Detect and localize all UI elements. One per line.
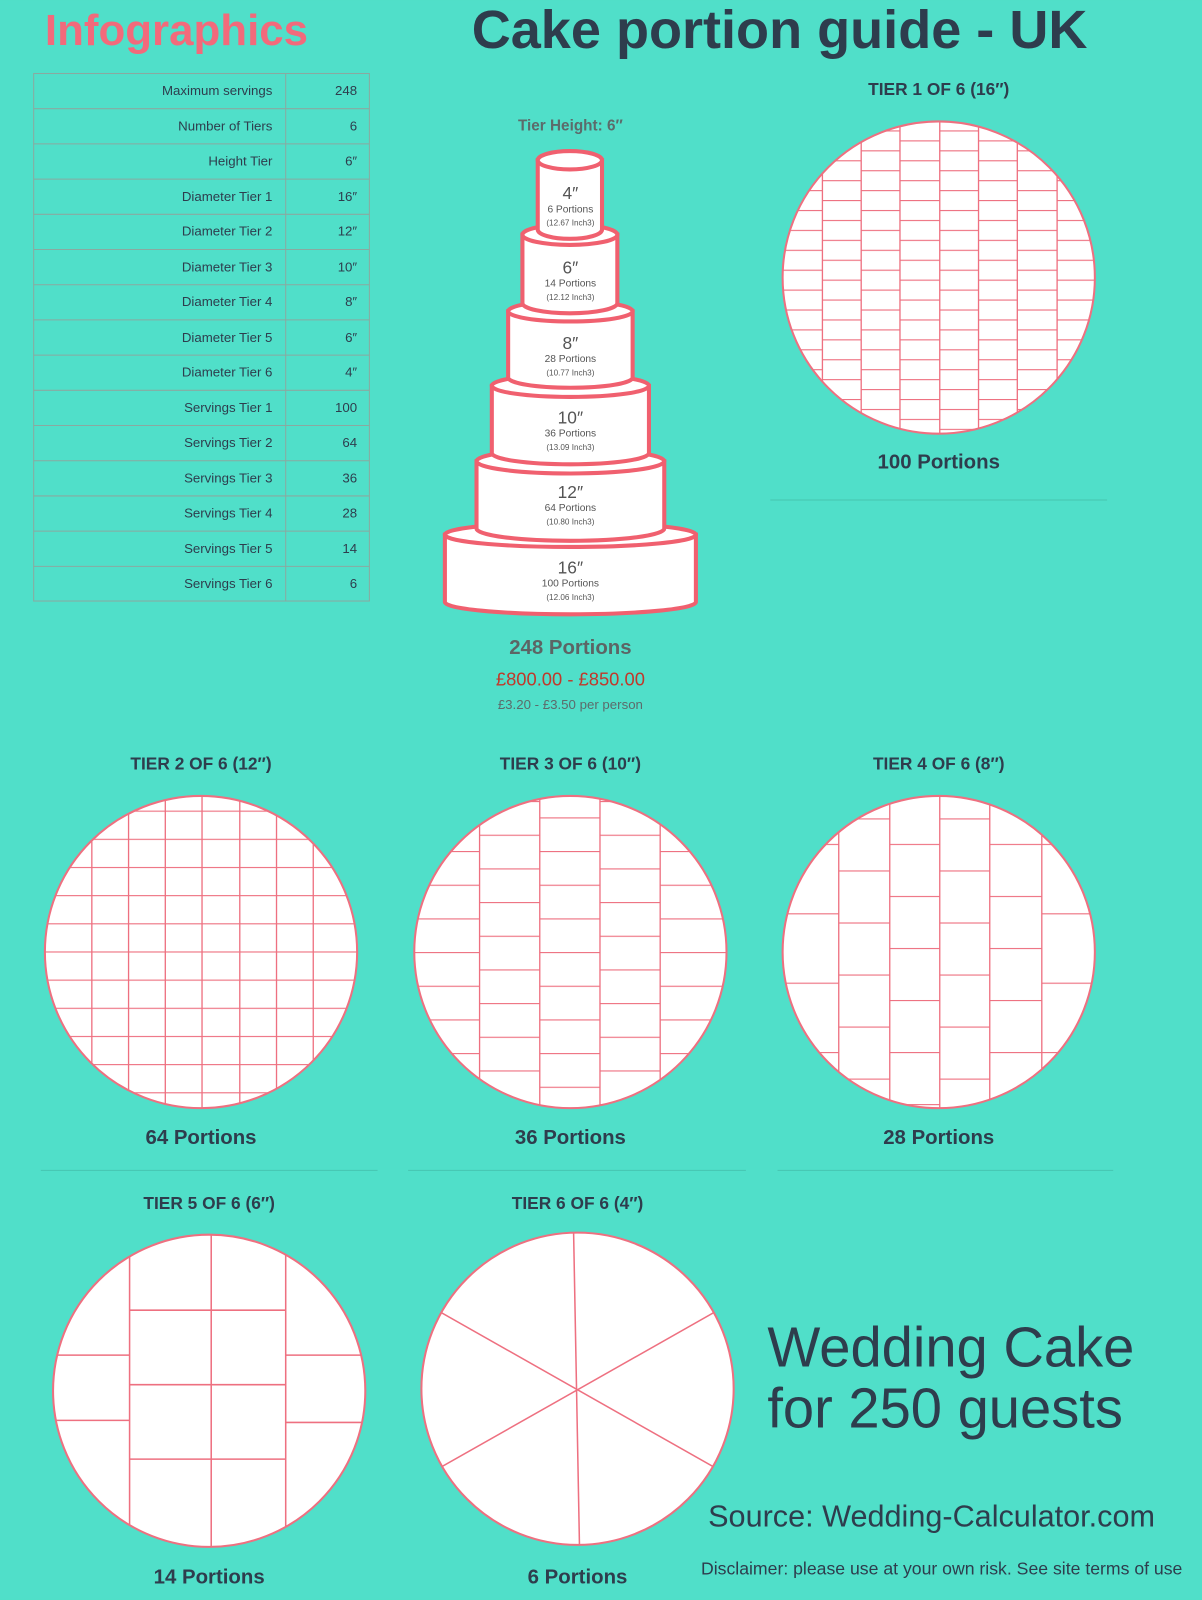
tier 1 panel: TIER 1 OF 6 (16″) bbox=[868, 79, 1009, 99]
table: cake specifications: Diameter Tier 1 bbox=[182, 189, 272, 204]
text: 8″ bbox=[562, 333, 578, 353]
table: cake specifications: Diameter Tier 3 bbox=[182, 259, 272, 274]
source: Source: Wedding-Calculator.com bbox=[708, 1500, 1155, 1534]
tier 2 panel: TIER 2 OF 6 (12″) bbox=[130, 753, 272, 773]
table: cake specifications: Diameter Tier 4 bbox=[182, 294, 272, 309]
cake totals: 248 Portions bbox=[509, 637, 632, 659]
tier 4 panel: TIER 4 OF 6 (8″) bbox=[873, 753, 1005, 773]
table: cake specifications: 6″ bbox=[345, 153, 357, 168]
text: 4″ bbox=[562, 183, 578, 203]
table: cake specifications: Diameter Tier 5 bbox=[182, 330, 272, 345]
brand: Infographics: Infographics bbox=[45, 6, 308, 55]
cake totals bbox=[496, 637, 645, 712]
tier 6 panel: 6 Portions bbox=[528, 1567, 627, 1589]
table: cake specifications: Servings Tier 1 bbox=[184, 400, 272, 415]
text: 64 Portions bbox=[545, 503, 596, 514]
table: cake specifications: Servings Tier 5 bbox=[184, 541, 272, 556]
table: cake specifications: 64 bbox=[342, 435, 357, 450]
table: cake specifications: 28 bbox=[342, 505, 357, 520]
table: cake specifications: 16″ bbox=[338, 189, 357, 204]
cake tier height label: Tier Height: 6″ bbox=[518, 118, 623, 135]
text: (12.12 Inch3) bbox=[546, 293, 595, 302]
table: cake specifications: 6 bbox=[350, 576, 357, 591]
tier 4 panel: 28 Portions bbox=[883, 1127, 994, 1149]
table: cake specifications bbox=[34, 73, 369, 601]
table: cake specifications: 100 bbox=[335, 400, 357, 415]
tier 4 panel bbox=[775, 753, 1103, 1149]
table: cake specifications: 14 bbox=[342, 541, 357, 556]
text: (12.06 Inch3) bbox=[546, 593, 595, 602]
disclaimer: Disclaimer: please use at your own risk. See site terms of use bbox=[701, 1558, 1183, 1578]
tier 5 panel: TIER 5 OF 6 (6″) bbox=[143, 1193, 275, 1213]
tier 6 panel bbox=[408, 1193, 747, 1589]
title: Cake portion guide - UK bbox=[472, 0, 1087, 60]
text: 16″ bbox=[558, 557, 583, 577]
table: cake specifications: 6″ bbox=[345, 330, 357, 345]
table: cake specifications: Servings Tier 3 bbox=[184, 471, 272, 486]
table: cake specifications: Number of Tiers bbox=[178, 119, 273, 134]
table: cake specifications: 12″ bbox=[338, 224, 357, 239]
table: cake specifications: Diameter Tier 6 bbox=[182, 365, 272, 380]
cake totals: £800.00 - £850.00 bbox=[496, 669, 645, 690]
table: cake specifications: Diameter Tier 2 bbox=[182, 224, 272, 239]
text: 12″ bbox=[558, 482, 583, 502]
table: cake specifications: Servings Tier 4 bbox=[184, 505, 272, 520]
tier 5 panel bbox=[41, 1193, 378, 1589]
table: cake specifications: 4″ bbox=[345, 365, 357, 380]
headline: Wedding Cake for 250 guests bbox=[767, 1315, 1134, 1440]
tier 2 panel: 64 Portions bbox=[145, 1127, 257, 1149]
text: 36 Portions bbox=[545, 429, 596, 440]
tier 3 panel: TIER 3 OF 6 (10″) bbox=[500, 753, 641, 773]
text: 28 Portions bbox=[545, 354, 596, 365]
table: cake specifications: Servings Tier 2 bbox=[184, 435, 272, 450]
text: (10.77 Inch3) bbox=[546, 369, 595, 378]
table: cake specifications: 8″ bbox=[345, 294, 357, 309]
table: cake specifications: 10″ bbox=[338, 259, 357, 274]
cake totals: £3.20 - £3.50 per person bbox=[498, 697, 643, 712]
text: (10.80 Inch3) bbox=[546, 517, 595, 526]
text: 6 Portions bbox=[547, 204, 593, 215]
text: 10″ bbox=[558, 407, 583, 427]
tier 6 panel: TIER 6 OF 6 (4″) bbox=[512, 1193, 643, 1213]
table: cake specifications: 36 bbox=[342, 471, 357, 486]
text: (13.09 Inch3) bbox=[546, 443, 595, 452]
text: (12.67 Inch3) bbox=[546, 219, 595, 228]
table: cake specifications: 6 bbox=[350, 119, 357, 134]
text: 100 Portions bbox=[542, 579, 599, 590]
tier 3 panel: 36 Portions bbox=[515, 1127, 626, 1149]
headline: Wedding Cake for 250 guests: for 250 guests bbox=[767, 1377, 1123, 1440]
tier 1 panel: 100 Portions bbox=[878, 451, 1000, 473]
cake illustration bbox=[445, 151, 696, 614]
table: cake specifications: Servings Tier 6 bbox=[184, 576, 272, 591]
tier 3 panel bbox=[408, 753, 732, 1149]
table: cake specifications: Height Tier bbox=[208, 153, 273, 168]
headline: Wedding Cake for 250 guests: Wedding Cake bbox=[767, 1315, 1134, 1378]
table: cake specifications: 248 bbox=[335, 83, 357, 98]
tier 1 panel bbox=[775, 79, 1103, 473]
text: 14 Portions bbox=[545, 279, 596, 290]
tier 5 panel: 14 Portions bbox=[154, 1567, 265, 1589]
tier 2 panel bbox=[41, 753, 367, 1149]
text: 6″ bbox=[562, 257, 578, 277]
table: cake specifications: Maximum servings bbox=[162, 83, 273, 98]
